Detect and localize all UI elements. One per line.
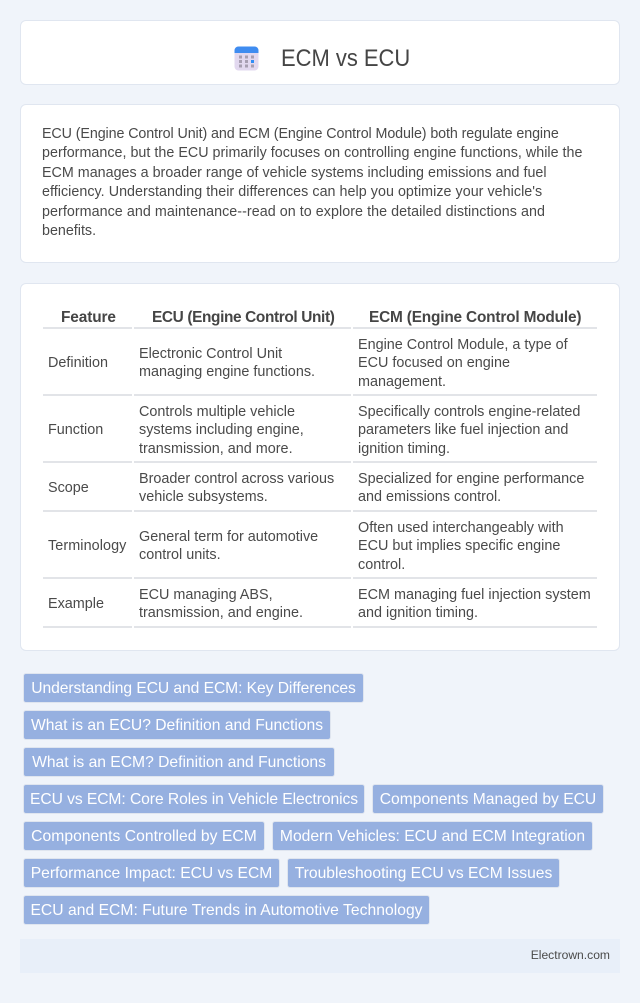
tag: what is ECM xyxy=(23,747,335,777)
terminology ECM: Often used interchangeably with xyxy=(358,520,564,536)
terminology ECM: ECU but implies specific engine xyxy=(358,538,560,554)
example ECU: transmission, and engine. xyxy=(139,605,303,621)
scope ECU xyxy=(139,471,334,505)
function ECU: systems including engine, xyxy=(139,422,304,438)
terminology ECU xyxy=(139,529,318,563)
tag: modern vehicles xyxy=(272,821,593,851)
tag: what is ECM: What is an ECM? Definition and Functions xyxy=(32,754,326,771)
definition ECU xyxy=(139,346,315,380)
tag: core roles xyxy=(23,784,365,814)
scope ECM: Specialized for engine performance xyxy=(358,471,584,487)
tag: understanding: Understanding ECU and ECM: Key Differences xyxy=(31,680,356,697)
tag: future trends xyxy=(23,895,430,925)
definition ECU: managing engine functions. xyxy=(139,364,315,380)
intro text xyxy=(42,126,582,239)
definition ECM xyxy=(358,337,568,390)
function ECU xyxy=(139,404,304,457)
scope ECU: vehicle subsystems. xyxy=(139,489,268,505)
tag: future trends: ECU and ECM: Future Trends in Automotive Technology xyxy=(30,902,423,919)
function ECM: ignition timing. xyxy=(358,441,450,457)
definition ECM: Engine Control Module, a type of xyxy=(358,337,568,353)
table header: feature: Feature xyxy=(61,309,116,326)
tag: troubleshooting: Troubleshooting ECU vs ECM Issues xyxy=(295,865,552,882)
row: terminology: Terminology xyxy=(48,538,126,554)
function ECU: transmission, and more. xyxy=(139,441,293,457)
row: scope: Scope xyxy=(48,480,89,496)
tag: troubleshooting xyxy=(287,858,560,888)
function ECM: Specifically controls engine-related xyxy=(358,404,580,420)
tag: components ECU xyxy=(372,784,604,814)
example ECU xyxy=(139,587,303,621)
tag: components ECU: Components Managed by ECU xyxy=(380,791,596,808)
intro text: ECM manages a broader range of vehicle systems including emissions and fuel xyxy=(42,165,547,181)
panel: introduction xyxy=(20,104,620,263)
definition ECU: Electronic Control Unit xyxy=(139,346,282,362)
function ECM: parameters like fuel injection and xyxy=(358,422,568,438)
intro text: efficiency. Understanding their differences can help you optimize your vehicle's xyxy=(42,184,542,200)
example ECM: ECM managing fuel injection system xyxy=(358,587,591,603)
scope ECU: Broader control across various xyxy=(139,471,334,487)
title: ECM vs ECU xyxy=(281,46,410,72)
panel: comparison table xyxy=(20,283,620,651)
tag: what is ECU xyxy=(23,710,331,740)
row: function: Function xyxy=(48,422,103,438)
definition ECM: management. xyxy=(358,374,446,390)
intro text: ECU (Engine Control Unit) and ECM (Engine Control Module) both regulate engine xyxy=(42,126,559,142)
tag: understanding xyxy=(23,673,364,703)
footer source: Electrown.com xyxy=(531,948,610,962)
table header: ECU: ECU (Engine Control Unit) xyxy=(152,309,335,326)
function ECM xyxy=(358,404,580,457)
example ECM xyxy=(358,587,591,621)
intro text: benefits. xyxy=(42,223,96,239)
scope ECM xyxy=(358,471,584,505)
scope ECM: and emissions control. xyxy=(358,489,501,505)
tag: what is ECU: What is an ECU? Definition and Functions xyxy=(31,717,323,734)
intro text: performance and maintenance--read on to explore the detailed distinctions and xyxy=(42,204,545,220)
tag: components ECM: Components Controlled by ECM xyxy=(31,828,257,845)
terminology ECU: General term for automotive xyxy=(139,529,318,545)
tag: performance xyxy=(23,858,280,888)
footer bar xyxy=(20,939,620,973)
row: example: Example xyxy=(48,596,104,612)
row: definition: Definition xyxy=(48,355,108,371)
example ECU: ECU managing ABS, xyxy=(139,587,273,603)
tag: core roles: ECU vs ECM: Core Roles in Vehicle Electronics xyxy=(30,791,358,808)
icon: calendar grid xyxy=(234,46,258,70)
tag: performance: Performance Impact: ECU vs ECM xyxy=(31,865,272,882)
definition ECM: ECU focused on engine xyxy=(358,355,510,371)
table header: ECM: ECM (Engine Control Module) xyxy=(369,309,581,326)
tag: components ECM xyxy=(23,821,265,851)
terminology ECU: control units. xyxy=(139,547,221,563)
terminology ECM: control. xyxy=(358,557,405,573)
tag: modern vehicles: Modern Vehicles: ECU and ECM Integration xyxy=(280,828,585,845)
intro text: performance, but the ECU primarily focuses on controlling engine functions, while the xyxy=(42,145,582,161)
terminology ECM xyxy=(358,520,564,573)
function ECU: Controls multiple vehicle xyxy=(139,404,295,420)
header card xyxy=(20,20,620,85)
example ECM: and ignition timing. xyxy=(358,605,478,621)
